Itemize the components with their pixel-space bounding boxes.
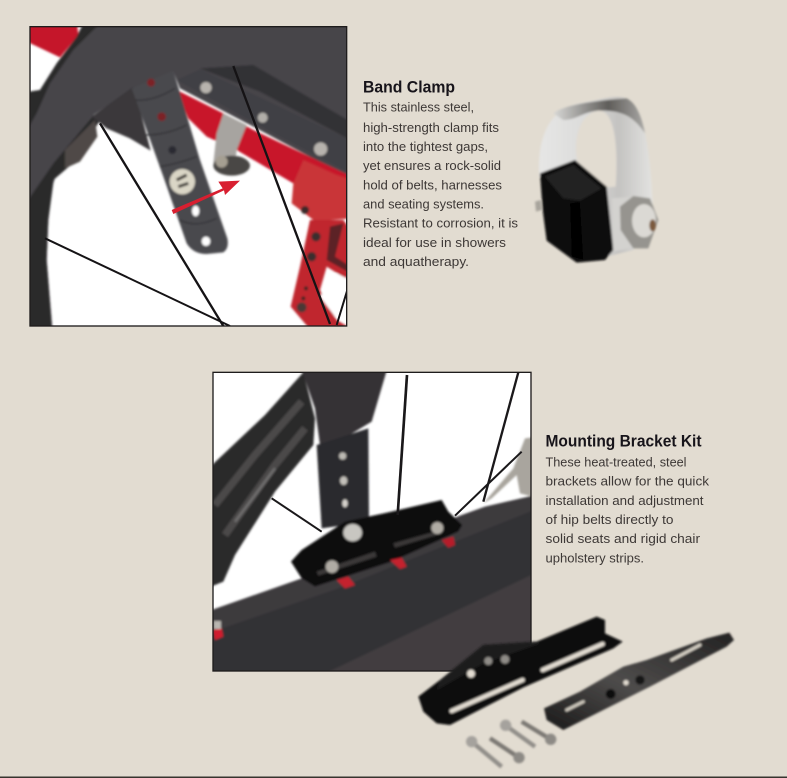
bottom rule <box>0 776 787 778</box>
text block: band clamp description: This stainless steel, <box>363 100 474 114</box>
text block: mounting bracket description: upholstery strips. <box>546 551 644 565</box>
text block: band clamp description: Resistant to corrosion, it is <box>363 217 518 231</box>
text block: band clamp description: ideal for use in showers <box>363 236 506 250</box>
photo: mounting bracket on seat <box>205 365 538 678</box>
text block: mounting bracket description: solid seats and rigid chair <box>546 532 700 546</box>
text block: band clamp description: and seating systems. <box>363 198 484 212</box>
text block: mounting bracket description: These heat-treated, steel <box>546 456 686 470</box>
text block: band clamp description: into the tightest gaps, <box>363 140 488 154</box>
product image: mounting brackets and screws <box>418 617 734 767</box>
text block: band clamp description: yet ensures a rock-solid <box>363 159 501 173</box>
arrow: red pointer to clamp <box>172 181 240 214</box>
bracket: large <box>418 617 623 725</box>
spokes <box>45 66 348 326</box>
spokes <box>272 372 522 532</box>
text block: band clamp description <box>363 100 518 269</box>
heading: Mounting Bracket Kit: Mounting Bracket Kit <box>546 433 702 451</box>
text block: mounting bracket description <box>546 456 710 565</box>
text block: band clamp description: and aquatherapy. <box>363 255 469 269</box>
text block: mounting bracket description: brackets allow for the quick <box>546 475 710 489</box>
product image: band clamp <box>535 97 658 263</box>
text block: band clamp description: hold of belts, harnesses <box>363 178 502 192</box>
text block: mounting bracket description: installation and adjustment <box>546 494 704 508</box>
text block: mounting bracket description: of hip belts directly to <box>546 513 674 527</box>
text block: band clamp description: high-strength clamp fits <box>363 121 499 135</box>
heading: Band Clamp: Band Clamp <box>363 79 455 97</box>
screws <box>466 720 556 767</box>
photo: band clamp on wheelchair <box>23 20 353 333</box>
bracket: small <box>544 633 734 730</box>
